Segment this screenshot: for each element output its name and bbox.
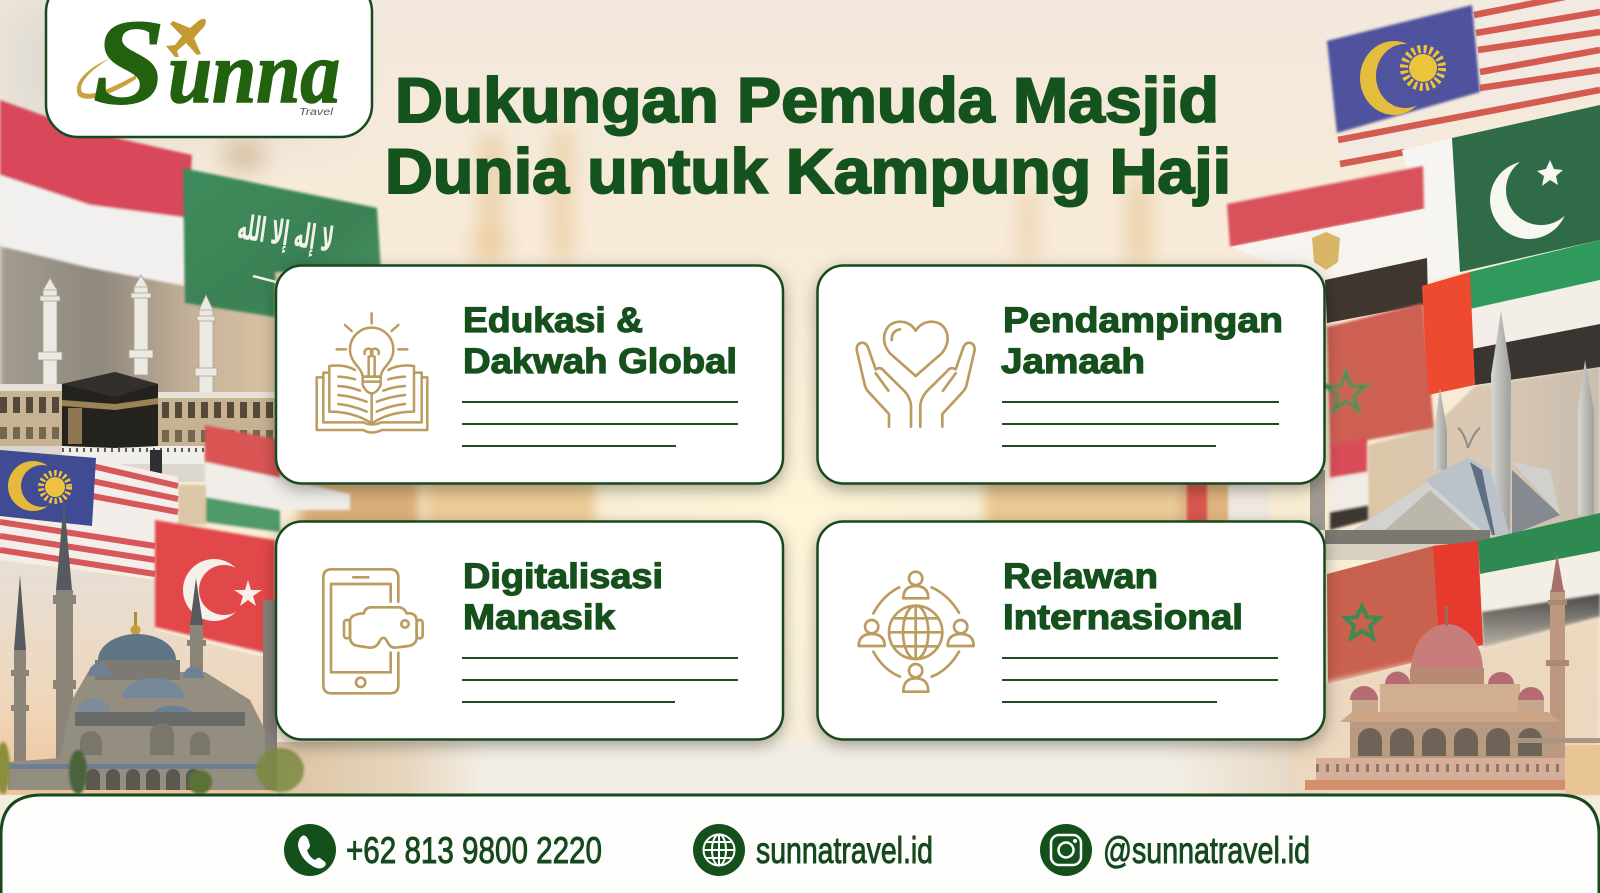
- panel: Digitalisasi Manasik: [276, 522, 783, 740]
- contact: instagram handle: @sunnatravel.id: [1103, 830, 1310, 871]
- flag: UAE (upper): [1422, 240, 1600, 395]
- flag: Egypt (right): [1227, 166, 1428, 323]
- icon: smartphone and VR headset: [323, 569, 423, 693]
- heading: [463, 557, 663, 637]
- flag: Morocco (upper): [1326, 303, 1434, 447]
- scene: Istanbul sky: [0, 560, 275, 795]
- contact: website: sunnatravel.id: [756, 830, 933, 871]
- flag: Indonesia (left): [0, 100, 192, 286]
- flag: small blurred tricolor: [1187, 437, 1368, 530]
- heading: Edukasi &: [463, 301, 643, 340]
- scene: Mecca sky: [0, 245, 280, 445]
- heading: Manasik: [463, 598, 616, 637]
- icon: instagram: [1040, 824, 1092, 876]
- mosque: Masjidil Haram minarets: [38, 275, 217, 393]
- title: Dunia untuk Kampung Haji: [385, 137, 1231, 207]
- footer contact bar: [1, 795, 1599, 893]
- scene: Islamabad sky: [1368, 367, 1600, 555]
- heading: [1003, 557, 1243, 637]
- text placeholder lines: [462, 658, 738, 702]
- logo: wordmark: unna: [168, 25, 340, 122]
- trees: [0, 742, 304, 794]
- logo panel: [46, 0, 372, 137]
- mosque: colonnade around the Kaaba: [0, 384, 278, 452]
- panel: Edukasi & Dakwah Global: [276, 266, 783, 484]
- logo: wordmark: [93, 0, 340, 130]
- icon: hands holding heart: [857, 322, 975, 427]
- panel: Relawan Internasional: [818, 522, 1324, 740]
- Kaaba: [62, 372, 158, 448]
- heading: Pendampingan: [1003, 301, 1283, 340]
- heading: Dakwah Global: [463, 342, 737, 381]
- text placeholder lines: [1002, 658, 1278, 702]
- flag: Egypt (left, blurred): [178, 425, 350, 532]
- icon: open book with light bulb: [317, 313, 427, 432]
- right collage: flags and mosques: [1187, 0, 1600, 795]
- heading: Internasional: [1003, 598, 1243, 637]
- heading: Digitalisasi: [463, 557, 663, 596]
- icon: globe: [693, 824, 745, 876]
- flag: UAE (lower): [1478, 513, 1600, 648]
- floor and pilgrims: [0, 446, 210, 482]
- text placeholder lines: [1002, 402, 1279, 446]
- text placeholder lines: [462, 402, 738, 446]
- flag: Turkey: [155, 520, 275, 655]
- flag: Saudi Arabia: [183, 168, 381, 317]
- scene: Putrajaya sky: [1290, 617, 1600, 795]
- mosque: Putra Mosque: [1305, 553, 1600, 795]
- panel: Pendampingan Jamaah: [818, 266, 1324, 484]
- icon: phone: [284, 824, 336, 876]
- heading: [1001, 301, 1283, 381]
- flag: Malaysia (left): [0, 450, 178, 578]
- heading: Relawan: [1003, 557, 1158, 596]
- flag: Morocco (lower): [1327, 541, 1483, 684]
- title: [385, 66, 1231, 207]
- flag: Malaysia (right): [1327, 0, 1600, 168]
- logo: airplane: [166, 19, 206, 57]
- flag: Pakistan: [1402, 105, 1600, 282]
- icon: globe with volunteers: [859, 572, 974, 692]
- logo: gold swoosh: [77, 58, 136, 99]
- title: Dukungan Pemuda Masjid: [395, 66, 1219, 136]
- flag: Saudi Arabia: لا إله إلا الله: [235, 208, 336, 261]
- left collage: flags and mosques: [0, 100, 381, 795]
- mosque: Blue Mosque: [8, 500, 277, 790]
- logo: Travel label: Travel: [299, 106, 334, 118]
- contact: phone number: +62 813 9800 2220: [346, 830, 602, 871]
- heading: [463, 301, 737, 381]
- mosque: Faisal Mosque: [1310, 311, 1594, 560]
- heading: Jamaah: [1001, 342, 1145, 381]
